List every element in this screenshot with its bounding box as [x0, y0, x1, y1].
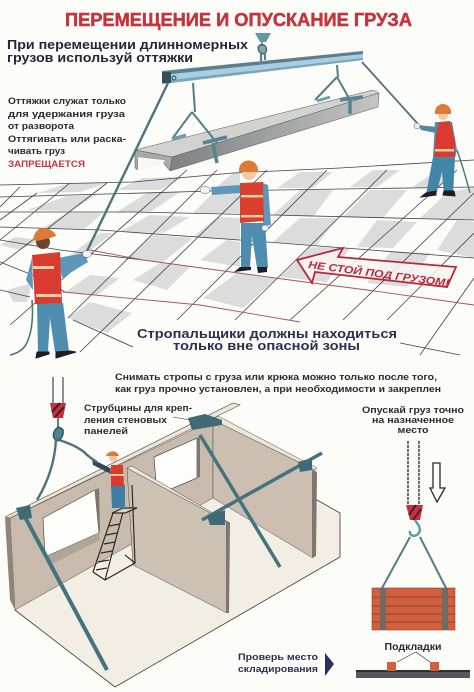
text: lower load precisely: [362, 405, 464, 436]
label: check storage place: складирования: [238, 664, 318, 675]
text: riggers stay outside danger zone: только вне опасной зоны: [173, 339, 360, 353]
label: check storage place: Проверь место: [238, 652, 318, 663]
crane cables: [408, 441, 419, 504]
text block: guy ropes rule: чивать груз: [8, 146, 66, 156]
text block: guy ropes rule: от разворота: [8, 121, 75, 131]
worker left: [10, 228, 92, 358]
text: riggers stay outside danger zone: Стропальщики должны находиться: [137, 327, 397, 341]
warning arrow sign: НЕ СТОЙ ПОД ГРУЗОМ!: [308, 258, 451, 290]
text: lower load precisely: место: [398, 425, 429, 436]
brace rods: [25, 435, 322, 670]
label: supports: Подкладки: [384, 642, 442, 653]
label: clamps: ления стеновых: [84, 415, 167, 425]
lifting beam with load: [135, 33, 379, 171]
supports diagram: [356, 652, 470, 678]
wall clamps: [16, 414, 312, 525]
concrete channel load: [135, 90, 379, 171]
title: ПЕРЕМЕЩЕНИЕ И ОПУСКАНИЕ ГРУЗА: [65, 10, 412, 30]
text: removing slings: [115, 372, 441, 395]
heading: long loads: [7, 37, 249, 65]
text block: guy ropes rule: [8, 96, 127, 169]
label: check storage place: [238, 652, 334, 676]
warning arrow sign: [297, 248, 456, 290]
crate on crane hook: [372, 505, 455, 630]
text block: guy ropes rule: Оттяжки служат только: [8, 96, 127, 106]
label: clamps: [84, 403, 192, 436]
partition wall near: [127, 466, 230, 613]
ladder: [93, 485, 137, 580]
hook block top: [255, 33, 271, 61]
guy rope right: [362, 62, 418, 124]
partition wall far: [213, 416, 317, 558]
text: removing slings: как груз прочно установлен, а при необходимости и закреплен: [115, 384, 441, 395]
spreader beam: [162, 51, 363, 84]
label: clamps: Струбцины для креп-: [84, 403, 192, 413]
text: removing slings: Снимать стропы с груза или крюка можно только после того,: [115, 372, 437, 383]
floor slab: [15, 440, 340, 687]
wall panels installation scene: [5, 377, 340, 687]
worker center: [200, 160, 271, 273]
worker on ladder: [92, 451, 125, 508]
text: lower load precisely: Опускай груз точно: [362, 405, 464, 416]
arrow: lowering direction: [430, 463, 445, 502]
tiled floor with danger zone: [0, 160, 474, 355]
slings and clamps: [172, 65, 363, 163]
text block: guy ropes rule: Оттягивать или раска-: [8, 134, 126, 144]
heading: long loads: грузов используй оттяжки: [7, 50, 193, 65]
back wall with windows: [5, 403, 240, 610]
heading: long loads: При перемещении длинномерных: [7, 37, 249, 52]
text block: guy ropes rule: ЗАПРЕЩАЕТСЯ: [8, 159, 85, 169]
text: riggers stay outside danger zone: [137, 327, 397, 353]
guy rope left: [87, 83, 168, 251]
text block: guy ropes rule: для удержания груза: [8, 109, 126, 119]
label: clamps: панелей: [84, 426, 128, 436]
worker right: [414, 104, 470, 197]
crane hook with sling: [37, 377, 97, 500]
text: lower load precisely: на назначенное: [372, 415, 454, 426]
